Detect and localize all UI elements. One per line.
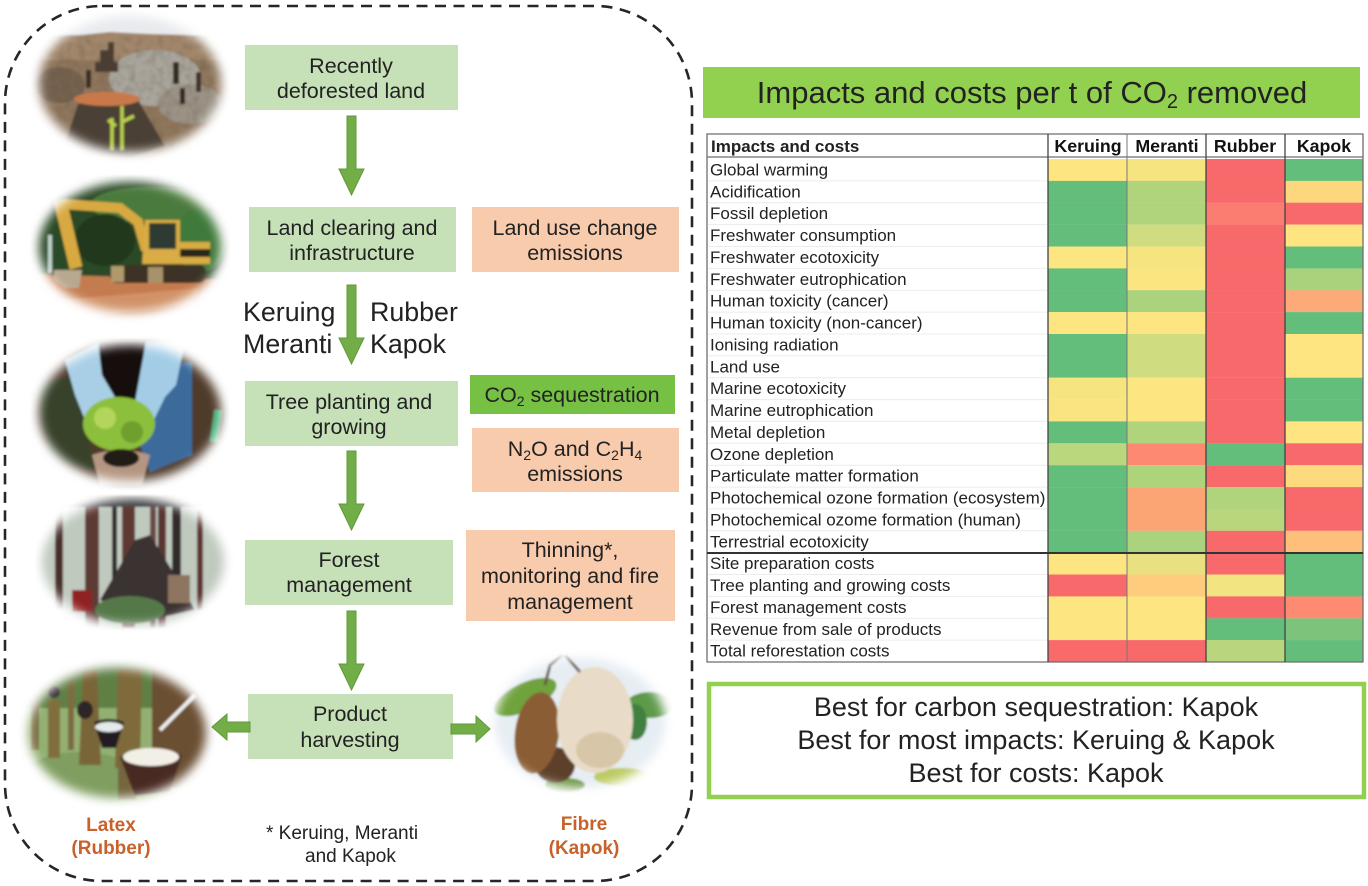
label: fibre (kapok) [549, 814, 619, 859]
heatmap cells [1048, 159, 1363, 662]
summary box: Best for carbon sequestration: Kapok [814, 692, 1259, 722]
photo: deforested land [32, 14, 228, 160]
arrow: step 3 to 4 [339, 451, 364, 530]
photo: rubber latex tapping [18, 658, 218, 808]
summary box: Best for most impacts: Keruing & Kapok [797, 725, 1275, 755]
table header: Kapok [1297, 136, 1351, 156]
panel: reforestation process [5, 5, 692, 881]
box: thinning, monitoring and fire management [466, 530, 675, 621]
arrow: step 1 to 2 [339, 116, 364, 195]
box: tree planting and growing [245, 381, 458, 446]
table header: Meranti [1135, 136, 1199, 156]
box: land use change emissions: Land use change [493, 216, 657, 240]
label: keruing and meranti: Keruing [243, 297, 335, 327]
heatmap table [707, 134, 1363, 662]
row labels: Freshwater consumption [710, 226, 896, 245]
table header: Impacts and costs [711, 137, 859, 156]
row labels: Total reforestation costs [710, 642, 890, 661]
label: keruing and meranti [243, 297, 335, 359]
box: CO2 sequestration: CO [484, 383, 517, 407]
row labels: Acidification [710, 182, 801, 201]
box: N2O and C2H4 emissions: 2 [523, 447, 531, 463]
row labels: Freshwater eutrophication [710, 270, 907, 289]
box: N2O and C2H4 emissions: 2 [611, 447, 619, 463]
label: fibre (kapok): Fibre [561, 814, 607, 835]
arrow: step 4 to 5 [339, 611, 364, 690]
title bar [703, 67, 1360, 118]
row labels: Marine eutrophication [710, 401, 873, 420]
title bar: removed [1178, 75, 1307, 110]
footnote: * Keruing, Meranti [266, 823, 418, 844]
box: land use change emissions [472, 207, 679, 272]
box: recently deforested land: Recently [309, 54, 393, 78]
table header: Rubber [1214, 136, 1276, 156]
summary box: Best for costs: Kapok [908, 758, 1164, 788]
box: thinning, monitoring and fire management: Thinning*, [522, 538, 618, 562]
row labels: Revenue from sale of products [710, 620, 942, 639]
box: CO2 sequestration: 2 [517, 393, 525, 409]
row labels: Freshwater ecotoxicity [710, 248, 880, 267]
box: tree planting and growing: growing [311, 415, 387, 439]
label: rubber and kapok [370, 297, 458, 359]
box: N2O and C2H4 emissions: N [508, 437, 523, 461]
row labels: Terrestrial ecotoxicity [710, 532, 869, 551]
box: recently deforested land [245, 45, 458, 110]
row labels: Ozone depletion [710, 445, 834, 464]
box: tree planting and growing: Tree planting and [266, 390, 432, 414]
row labels: Photochemical ozome formation (human) [710, 510, 1021, 529]
box: product harvesting: Product [313, 702, 387, 726]
label: rubber and kapok: Kapok [370, 329, 447, 359]
arrow: step 2 to 3 [339, 285, 364, 364]
row labels: Photochemical ozone formation (ecosystem) [710, 489, 1045, 508]
row labels: Fossil depletion [710, 204, 828, 223]
box: product harvesting: harvesting [300, 728, 400, 752]
label: fibre (kapok): (Kapok) [549, 838, 619, 859]
table header [711, 136, 1351, 156]
label: keruing and meranti: Meranti [243, 329, 332, 359]
label: latex (rubber): Latex [86, 815, 136, 836]
box: thinning, monitoring and fire management: monitoring and fire [481, 564, 659, 588]
row labels: Land use [710, 357, 780, 376]
row labels: Global warming [710, 160, 828, 180]
box: CO2 sequestration [470, 375, 675, 414]
box: N2O and C2H4 emissions: emissions [527, 462, 623, 486]
label: rubber and kapok: Rubber [370, 297, 458, 327]
row labels: Site preparation costs [710, 554, 874, 573]
box: forest management: management [286, 573, 412, 597]
row labels: Marine ecotoxicity [710, 379, 847, 398]
box: land use change emissions: emissions [527, 241, 623, 265]
box: forest management [245, 540, 453, 605]
row labels: Metal depletion [710, 423, 825, 442]
box: recently deforested land: deforested land [277, 79, 425, 103]
box: N2O and C2H4 emissions: 4 [634, 447, 642, 463]
title bar: 2 [1167, 91, 1178, 113]
row labels: Forest management costs [710, 598, 907, 617]
arrow: to latex [212, 714, 250, 740]
box: N2O and C2H4 emissions: H [619, 437, 634, 461]
summary box [709, 684, 1364, 797]
box: forest management: Forest [319, 548, 379, 572]
row labels: Particulate matter formation [710, 467, 919, 486]
box: CO2 sequestration: sequestration [524, 383, 660, 407]
photo: kapok fibre [493, 654, 671, 792]
title bar: Impacts and costs per t of CO [757, 75, 1167, 110]
label: latex (rubber) [71, 815, 151, 859]
box: thinning, monitoring and fire management: management [507, 590, 633, 614]
box: N2O and C2H4 emissions: O and C [531, 437, 611, 461]
box: land clearing and infrastructure: Land clearing and [267, 216, 437, 240]
photo: excavator [30, 175, 230, 325]
photo: tree planting [30, 338, 230, 490]
box: N2O and C2H4 emissions [472, 428, 679, 492]
arrow: to fibre [451, 716, 490, 742]
table header: Keruing [1054, 136, 1122, 156]
box: land clearing and infrastructure: infrastructure [289, 241, 415, 265]
row labels: Human toxicity (cancer) [710, 292, 889, 311]
footnote: and Kapok [305, 846, 396, 867]
row labels: Human toxicity (non-cancer) [710, 314, 923, 333]
box: product harvesting [248, 694, 453, 759]
box: land clearing and infrastructure [249, 207, 456, 272]
row labels: Tree planting and growing costs [710, 576, 950, 595]
label: latex (rubber): (Rubber) [71, 838, 151, 859]
photo: forest management [35, 495, 235, 630]
row labels [710, 160, 1045, 661]
row labels: Ionising radiation [710, 336, 839, 354]
footnote [266, 823, 418, 867]
